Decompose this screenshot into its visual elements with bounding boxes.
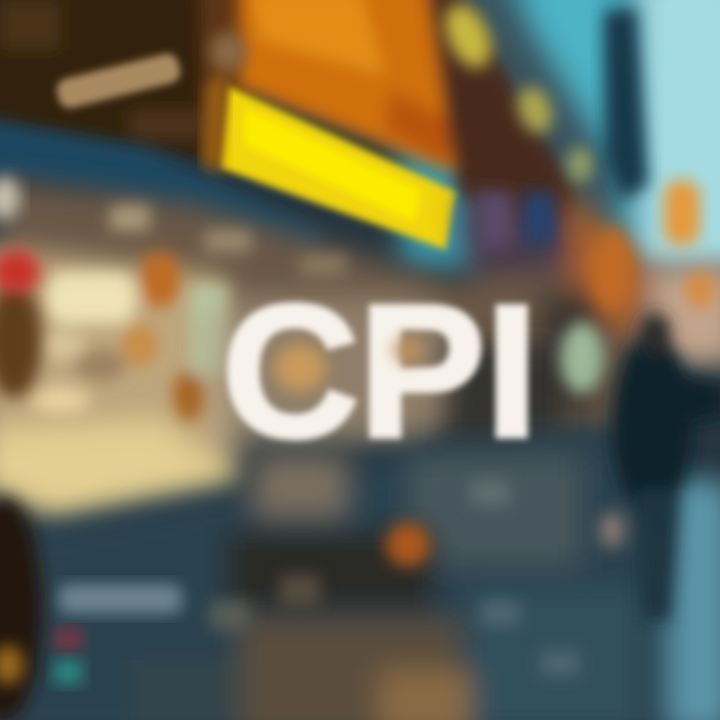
blue stripe under the roof <box>0 120 330 255</box>
tan sign on dark wood <box>54 51 183 111</box>
yellow sign <box>220 86 456 250</box>
hanging round lamps <box>436 0 593 183</box>
dark tower <box>604 8 648 200</box>
sky and upper right buildings <box>400 0 720 280</box>
lower street area <box>0 430 720 720</box>
person in dark coat <box>600 313 720 620</box>
orange lantern right <box>664 180 700 246</box>
warm reflections inside the letters <box>274 337 423 392</box>
food counter, left <box>0 245 240 522</box>
orange awning <box>238 0 575 270</box>
shadow around the lettering <box>440 345 560 440</box>
dark wooden storefront, top left <box>0 0 260 170</box>
stall middle band <box>0 180 720 430</box>
stall ceiling items <box>110 205 346 275</box>
CPI lettering: CPI <box>222 266 538 476</box>
dark object, bottom left corner <box>0 498 42 720</box>
